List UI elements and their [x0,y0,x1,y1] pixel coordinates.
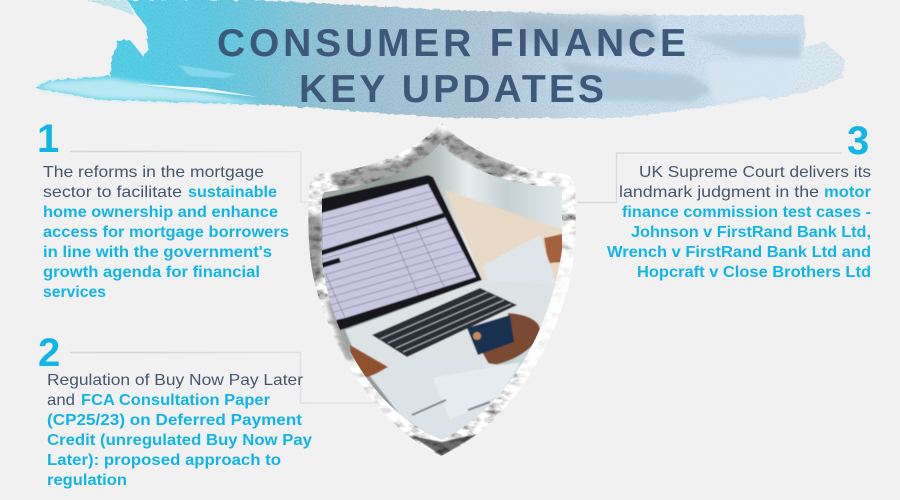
silver foil frame [308,122,576,456]
connector: item 1 [70,152,312,202]
table [445,190,562,282]
item 1 text: home ownership and enhance [43,204,278,221]
desk background [322,143,562,426]
item 1 [37,117,289,301]
card chip [473,332,481,340]
item 3 text: Johnson v FirstRand Bank Ltd, [631,224,871,241]
number 2: 2 [38,331,60,375]
item 1 text: services [43,284,106,301]
item 1 text: in line with the government's [43,244,272,261]
item 3 text: finance commission test cases - [622,204,871,221]
left hand [350,345,388,380]
watercolour brush banner [35,0,845,118]
number 1: 1 [37,117,59,161]
laptop screen bezel [320,175,482,336]
right hand holding card [482,313,540,366]
item 3 text: UK Supreme Court delivers its [639,164,871,181]
item 3 text [607,164,871,281]
item 1 text: growth agenda for financial [43,264,260,281]
keyboard [372,288,517,357]
title: KEY UPDATES [299,68,604,111]
item 3 [607,119,871,281]
item 1 text: sustainable [188,184,277,201]
item 1 text: The reforms in the mortgage [43,164,264,181]
title [217,22,686,111]
item 2 text: Credit (unregulated Buy Now Pay [47,432,312,449]
item 1 text: sector to facilitate [43,184,182,201]
spreadsheet lines [320,191,478,320]
connector: item 2 [70,352,376,403]
laptop screen spreadsheet [322,184,476,323]
item 2 text: (CP25/23) on Deferred Payment [47,412,303,429]
photo: laptop, card and papers [315,140,570,450]
item 2 [38,331,312,489]
item 3 text: motor [824,184,871,201]
bank card [467,315,514,355]
hand at right [544,234,562,264]
paper held in hand [482,235,556,285]
title: CONSUMER FINANCE [217,22,686,65]
item 2 text: Later): proposed approach to [47,452,281,469]
item 1 text [43,164,289,301]
item 3 text: Hopcraft v Close Brothers Ltd [637,264,871,281]
laptop base [344,280,554,374]
item 2 text: Regulation of Buy Now Pay Later [47,372,304,389]
item 2 text: and [47,392,75,409]
number 3: 3 [847,119,869,163]
item 2 text: FCA Consultation Paper [81,392,270,409]
item 3 text: landmark judgment in the [619,184,819,201]
shield with photo [308,122,576,456]
item 1 text: access for mortgage borrowers [43,224,289,241]
connector: item 3 [577,153,842,202]
item 2 text: regulation [47,472,127,489]
papers in foreground [370,362,520,440]
item 3 text: Wrench v FirstRand Bank Ltd and [607,244,871,261]
item 2 text [47,372,312,489]
